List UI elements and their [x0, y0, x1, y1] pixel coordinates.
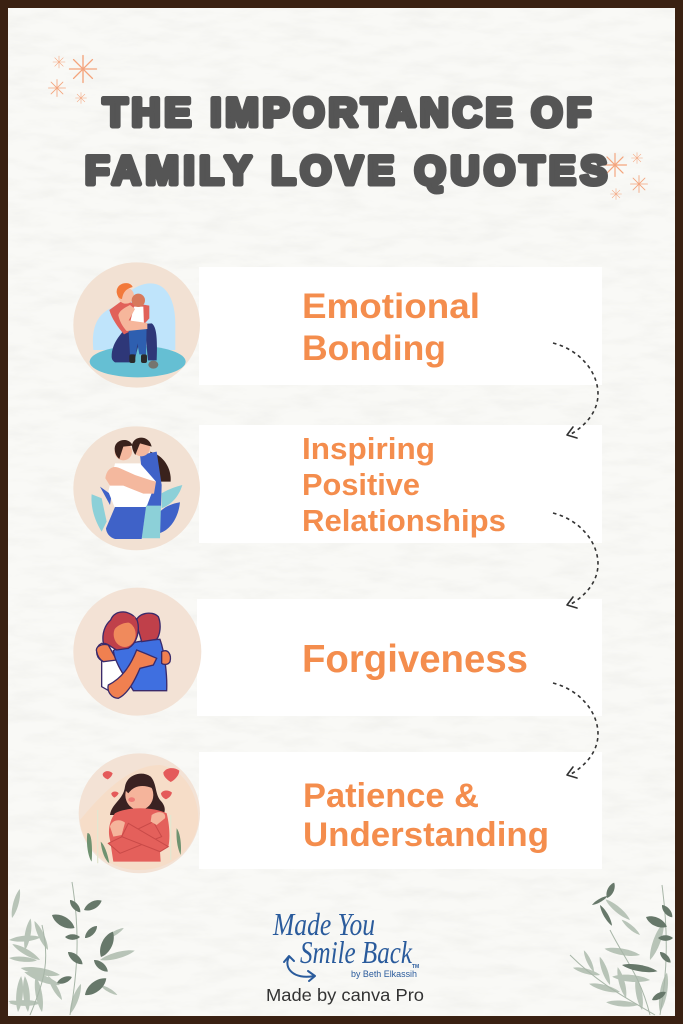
logo: Made You Smile Back: Smile Back	[300, 934, 413, 970]
label: emotional bonding: Bonding	[302, 329, 446, 368]
icon: woman hugging herself with hearts	[79, 753, 200, 873]
label: forgiveness: Forgiveness	[302, 638, 528, 681]
label: emotional bonding	[302, 287, 480, 368]
label: patience and understanding: Understanding	[303, 816, 549, 854]
logo: Made You Smile Back: by Beth Elkassih	[351, 969, 417, 979]
sparkles top left	[48, 56, 96, 104]
label: emotional bonding: Emotional	[302, 287, 480, 326]
foliage: bottom right plant	[570, 881, 675, 1015]
icon: two women embracing	[73, 426, 200, 550]
panel: emotional bonding	[199, 267, 602, 385]
icon: parent hugging child	[73, 262, 200, 388]
logo: Made You Smile Back	[272, 906, 419, 981]
credit text: Made by canva Pro	[266, 985, 424, 1005]
label: inspiring positive relationships: Inspiring	[302, 431, 435, 466]
label: inspiring positive relationships: Positive	[302, 467, 420, 502]
arrow: second to third	[553, 513, 598, 608]
panel: inspiring positive relationships	[199, 425, 602, 543]
title: THE IMPORTANCE OF	[103, 91, 591, 135]
label: inspiring positive relationships: Relationships	[302, 503, 506, 538]
arrow: third to fourth	[553, 683, 598, 778]
sparkles top right	[604, 152, 648, 200]
label: inspiring positive relationships	[302, 431, 506, 538]
panel: forgiveness	[197, 599, 602, 716]
title	[85, 91, 607, 193]
logo: Made You Smile Back: TM	[412, 964, 419, 970]
panel: patience and understanding	[199, 752, 602, 869]
title: FAMILY LOVE QUOTES	[85, 149, 607, 193]
logo arrow	[284, 956, 315, 981]
icon: couple hugging	[73, 588, 201, 716]
label: patience and understanding: Patience &	[303, 777, 479, 815]
label: patience and understanding	[303, 777, 549, 854]
logo: Made You Smile Back: Made You	[272, 906, 375, 942]
foliage: bottom left plant	[8, 882, 136, 1015]
arrow: first to second	[553, 343, 598, 438]
